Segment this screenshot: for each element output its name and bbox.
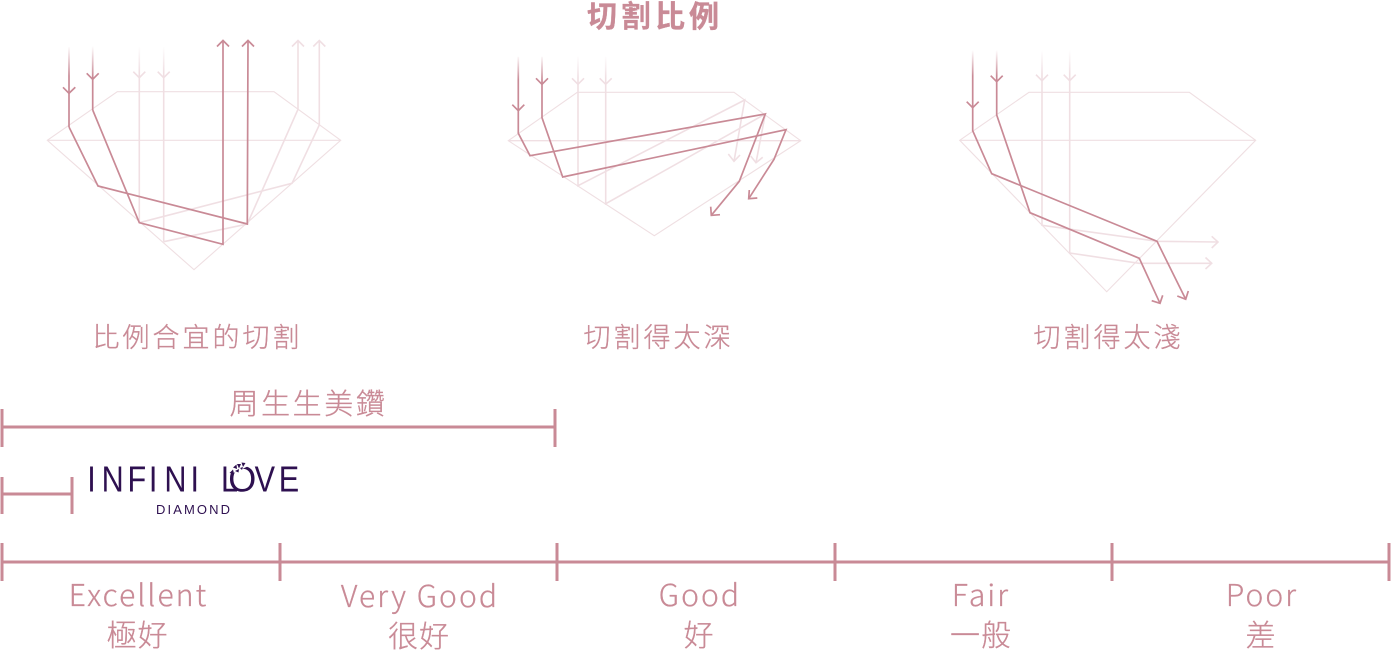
- rating: Good: [659, 571, 741, 650]
- faint light rays: [133, 40, 325, 242]
- logo: Infini Love Diamond: O: [228, 458, 256, 500]
- diagram: cut too deep: [508, 57, 801, 236]
- rating: Excellent: Excellent: [69, 571, 208, 615]
- diamond outline: [508, 92, 801, 236]
- rating: Very Good: [341, 572, 499, 650]
- caption: cut too shallow: 切割得太淺: [1034, 316, 1184, 355]
- diamond outline: [960, 92, 1256, 292]
- rating: Excellent: [69, 571, 208, 650]
- diagram: cut too shallow: [960, 50, 1256, 303]
- logo: Infini Love Diamond: [87, 458, 299, 517]
- faint light rays: [1036, 50, 1218, 269]
- rating: Very Good: Very Good: [341, 572, 499, 616]
- logo: Infini Love Diamond: DIAMOND: [156, 502, 232, 517]
- caption: cut too deep: 切割得太深: [584, 316, 734, 355]
- rating scale bar: [2, 543, 1389, 581]
- rating: Poor: [1226, 571, 1298, 650]
- range bar: Infini Love: [2, 477, 72, 514]
- logo: Infini Love Diamond: VE: [255, 460, 299, 500]
- diagram: well-proportioned cut: [47, 40, 341, 270]
- rating: Poor: Poor: [1226, 571, 1298, 615]
- main light rays: [967, 50, 1188, 303]
- rating: Good: Good: [659, 571, 741, 615]
- range bar: Chow Sang Sang: [2, 409, 555, 447]
- heading: Chow Sang Sang diamonds: 周生生美鑽: [229, 381, 388, 423]
- logo: Infini Love Diamond: INFINI L: [87, 460, 238, 500]
- rating: Fair: Fair: [952, 571, 1010, 615]
- diamond outline: [47, 92, 341, 270]
- faint light rays: [572, 57, 765, 204]
- main light rays: [63, 40, 254, 244]
- rating: Fair: [950, 571, 1012, 650]
- caption: well-proportioned cut: 比例合宜的切割: [92, 316, 302, 355]
- main light rays: [512, 57, 786, 215]
